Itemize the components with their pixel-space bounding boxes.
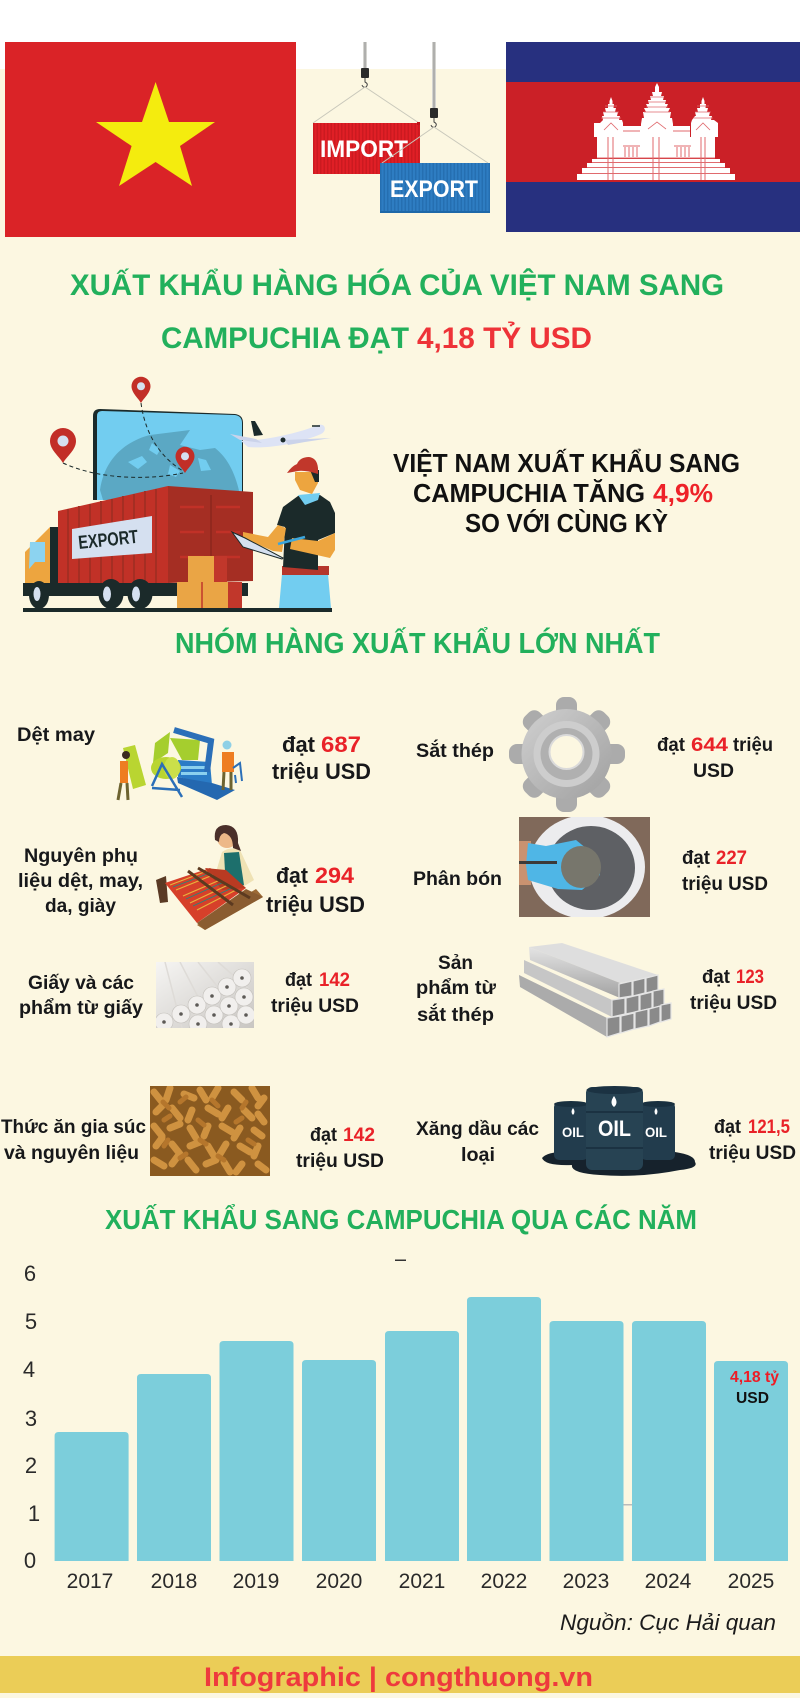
item: steel: USD	[693, 761, 734, 782]
icon: map pin left	[50, 428, 76, 463]
growth statement: 4,9%	[653, 478, 713, 508]
item: textile materials: đạt	[276, 863, 309, 888]
icon: oil barrels: OIL	[598, 1116, 631, 1141]
item: textile materials: da, giày	[45, 896, 116, 917]
import and export containers hanging from cranes	[313, 42, 490, 213]
x axis labels: 2019	[233, 1570, 279, 1593]
item: steel products: 123	[736, 967, 764, 988]
Vietnam flag	[5, 42, 296, 237]
item: textile materials: Nguyên phụ	[24, 846, 138, 867]
item: steel products: Sản	[438, 953, 473, 974]
item: textile materials: liệu dệt, may,	[18, 871, 143, 892]
2025 value label: 4,18 tỷ	[730, 1369, 779, 1386]
item: textile: 687	[321, 732, 361, 757]
growth statement: VIỆT NAM XUẤT KHẨU SANG	[393, 448, 740, 478]
illustration: export truck, world map screen and worker	[23, 377, 335, 612]
item: petroleum: đạt	[714, 1117, 742, 1138]
item: textile	[17, 725, 371, 800]
item: fertilizer: triệu USD	[682, 874, 768, 895]
growth statement: CAMPUCHIA TĂNG	[413, 478, 645, 508]
x axis labels: 2021	[399, 1570, 445, 1593]
section heading: exports by year: XUẤT KHẨU SANG CAMPUCHIA QUA CÁC NĂM	[105, 1204, 697, 1235]
icon: stacked steel beams	[519, 943, 671, 1037]
item: petroleum: 121,5	[748, 1117, 790, 1138]
footer banner	[0, 1656, 800, 1693]
item: steel: triệu	[733, 735, 773, 756]
item: steel products: phẩm từ	[416, 978, 496, 999]
y axis labels: 6	[24, 1261, 36, 1286]
footer banner: Infographic | congthuong.vn	[204, 1662, 593, 1692]
item: steel products: sắt thép	[417, 1004, 494, 1026]
Cambodia flag	[506, 42, 800, 232]
title: 4,18 TỶ USD	[417, 321, 592, 355]
item: petroleum: loại	[461, 1145, 495, 1166]
item: paper: Giấy và các	[28, 973, 134, 994]
y axis labels	[23, 1261, 40, 1573]
x axis labels: 2017	[67, 1570, 113, 1593]
truck cab	[25, 527, 59, 590]
2025 value label: USD	[736, 1390, 769, 1407]
x axis labels: 2023	[563, 1570, 609, 1593]
item: textile: đạt	[282, 732, 316, 757]
item: fertilizer	[413, 815, 768, 919]
2025 value label	[730, 1369, 779, 1407]
x axis labels: 2018	[151, 1570, 197, 1593]
delivery worker	[232, 457, 335, 608]
x axis labels: 2020	[316, 1570, 362, 1593]
item: fertilizer: 227	[716, 848, 747, 869]
icon: map pin top	[132, 377, 150, 403]
icon: map pin middle	[176, 447, 194, 473]
x axis labels	[67, 1570, 774, 1593]
item: petroleum: Xăng dầu các	[416, 1119, 539, 1140]
x axis labels: 2025	[728, 1570, 774, 1593]
photo: paper rolls	[155, 962, 255, 1033]
photo: feed pellets	[150, 1086, 270, 1176]
item: steel products	[416, 943, 777, 1037]
section heading: largest export groups: NHÓM HÀNG XUẤT KHẨU LỚN NHẤT	[175, 626, 660, 660]
item: animal feed: Thức ăn gia súc	[1, 1117, 146, 1138]
item: textile: Dệt may	[17, 725, 95, 746]
item: animal feed: triệu USD	[296, 1151, 384, 1172]
icon: gear	[509, 697, 625, 812]
item: fertilizer: đạt	[682, 848, 711, 869]
item: paper: phẩm từ giấy	[19, 998, 143, 1019]
item: paper: đạt	[285, 970, 313, 991]
x axis labels: 2022	[481, 1570, 527, 1593]
map screen with globe	[93, 409, 243, 500]
icon: textile machine	[118, 730, 242, 800]
truck chassis	[23, 583, 248, 596]
title: CAMPUCHIA ĐẠT	[161, 322, 409, 355]
item: steel products: đạt	[702, 967, 731, 988]
y axis labels: 1	[28, 1501, 40, 1526]
item: paper: triệu USD	[271, 996, 359, 1017]
photo: fertilizer in a sack	[519, 815, 650, 919]
item: animal feed: đạt	[310, 1125, 338, 1146]
item: petroleum: triệu USD	[709, 1143, 796, 1164]
crane cable and export container: EXPORT	[390, 176, 478, 203]
bar chart	[23, 1260, 788, 1593]
title: XUẤT KHẨU HÀNG HÓA CỦA VIỆT NAM SANG	[70, 268, 724, 302]
shipping container	[58, 486, 253, 583]
shipping container: EXPORT	[77, 527, 139, 554]
item: steel	[416, 697, 773, 812]
y axis labels: 5	[25, 1309, 37, 1334]
icon: yellow star	[96, 82, 215, 186]
icon: Angkor Wat temple	[577, 83, 735, 180]
x axis labels: 2024	[645, 1570, 692, 1593]
y axis labels: 3	[25, 1406, 37, 1431]
item: steel: Sắt thép	[416, 740, 494, 762]
crane cable and export container	[380, 42, 490, 213]
item: animal feed	[1, 1086, 384, 1176]
y axis labels: 2	[25, 1453, 37, 1478]
item: steel products: triệu USD	[690, 993, 777, 1014]
item: petroleum	[416, 1086, 796, 1176]
truck wheels	[29, 579, 152, 609]
source note: Nguồn: Cục Hải quan	[560, 1610, 776, 1635]
icon: weaver at loom	[156, 825, 263, 930]
y axis labels: 4	[23, 1357, 35, 1382]
icon: airplane	[230, 421, 331, 447]
item: paper	[19, 962, 359, 1033]
item: animal feed: và nguyên liệu	[4, 1143, 139, 1164]
growth statement	[393, 448, 740, 538]
item: textile materials	[18, 825, 365, 930]
y axis labels: 0	[24, 1548, 36, 1573]
item: paper: 142	[319, 970, 350, 991]
item: textile materials: triệu USD	[266, 892, 365, 917]
item: steel: 644	[691, 735, 729, 756]
crane cable and import container	[313, 42, 420, 174]
ground line	[23, 608, 332, 612]
crane cable and import container: IMPORT	[320, 136, 408, 163]
item: textile: triệu USD	[272, 759, 371, 784]
item: steel: đạt	[657, 735, 686, 756]
bars	[55, 1297, 788, 1561]
icon: oil barrels	[542, 1086, 696, 1176]
icon: oil barrels: OIL	[562, 1124, 584, 1140]
item: fertilizer: Phân bón	[413, 869, 502, 890]
growth statement: SO VỚI CÙNG KỲ	[465, 508, 668, 538]
item: animal feed: 142	[343, 1125, 375, 1146]
icon: oil barrels: OIL	[645, 1124, 667, 1140]
title	[70, 268, 724, 355]
cardboard boxes	[177, 556, 242, 608]
flight path dashed lines	[63, 403, 183, 477]
item: textile materials: 294	[315, 863, 355, 888]
